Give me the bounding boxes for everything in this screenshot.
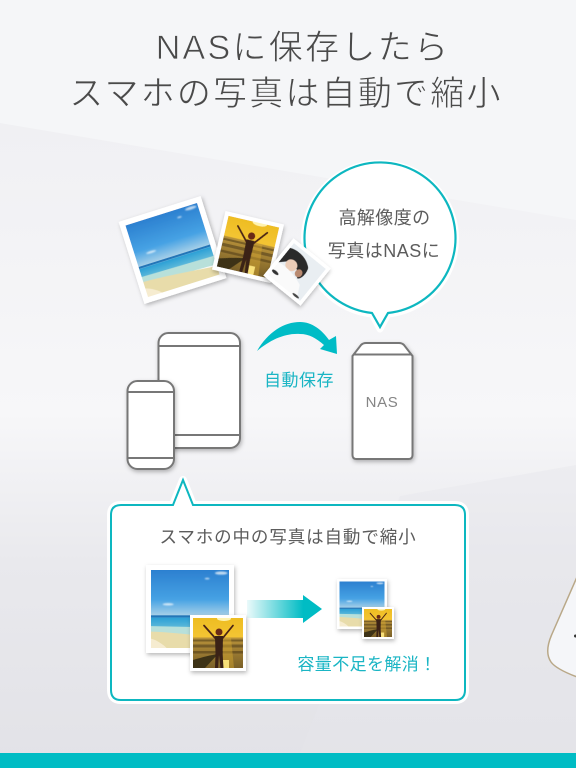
speech bubble: high resolution photos go to NAS [304,162,455,329]
panel: shrink photos on smartphone [111,480,465,700]
photo: family [263,238,331,306]
arrow: shrink [247,595,322,623]
NAS label: NAS [366,394,398,411]
label: auto save: 自動保存 [264,371,334,390]
large photo group [146,565,246,671]
icon: smartphone [128,381,174,469]
NAS body [352,343,412,459]
title line 2: スマホの写真は自動で縮小 [69,75,503,113]
title line 1: NASに保存したら [156,29,450,67]
callout: capacity shortage solved: 容量不足を解消！ [297,655,437,674]
bottom bar [0,753,576,768]
bubble text: 写真はNASに [328,241,440,261]
bubble text [328,208,440,261]
photo: beach [119,196,226,304]
bubble shape [304,162,455,329]
bubble text: 高解像度の [338,208,430,228]
panel shape [111,480,465,700]
panel heading: スマホの中の写真は自動で縮小 [159,527,417,547]
icon: tablet [158,333,240,448]
photo: sunset [212,211,284,283]
title [69,29,503,113]
arrow: auto save curve [257,322,337,354]
small photo group [337,579,394,639]
scattered photos [119,196,331,306]
phone edge at right [548,577,576,677]
icon: NAS [352,343,412,459]
